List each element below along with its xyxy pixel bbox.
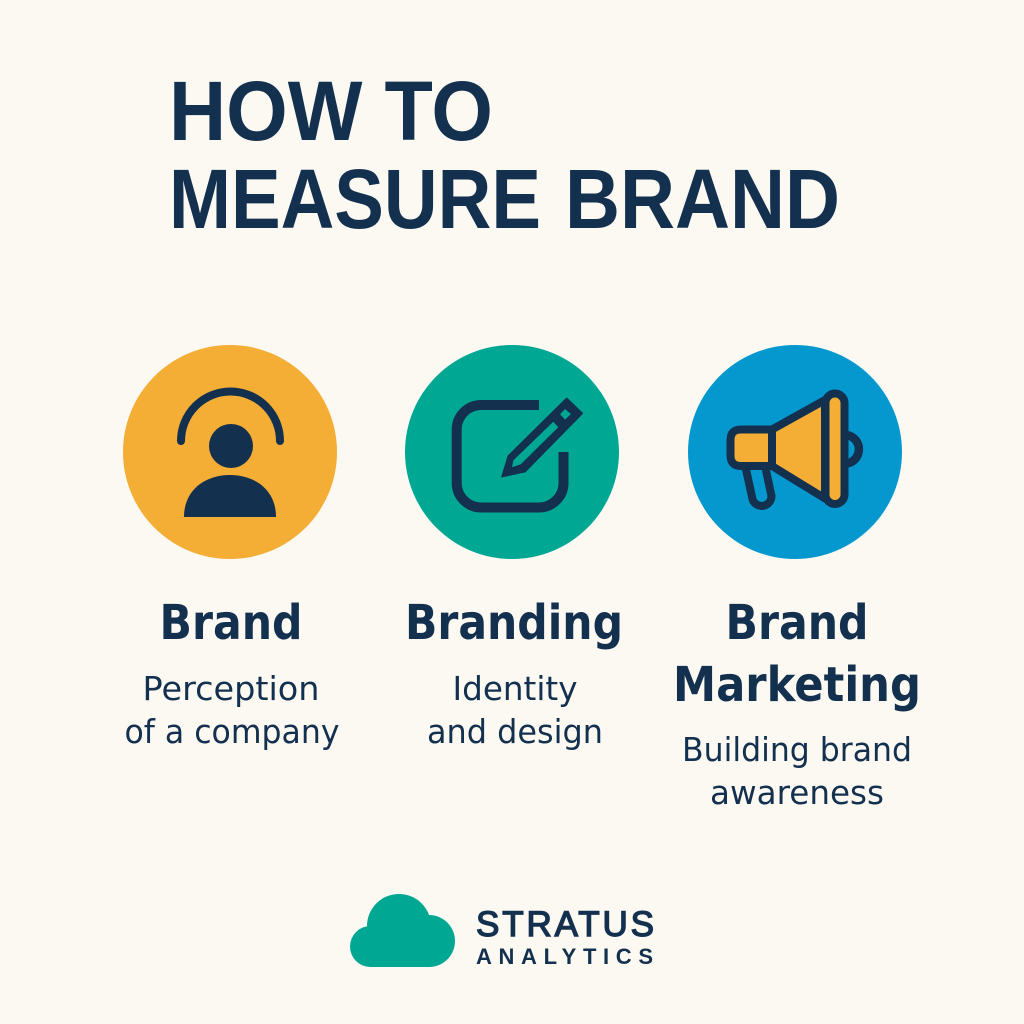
icon: megaphone on blue circle [688, 345, 902, 559]
logo text: Analytics: ANALYTICS [476, 944, 653, 969]
title [169, 64, 840, 246]
description line 2: brand: of a company [124, 712, 340, 751]
description: brand marketing: Building brand [682, 730, 912, 769]
icon: person with arc on orange circle [123, 345, 337, 559]
icon: pencil and square on green circle [405, 345, 619, 559]
heading: Brand Marketing: Marketing [673, 657, 921, 713]
description: brand: Perception [142, 669, 320, 708]
heading: Brand Marketing [673, 595, 921, 713]
description line 2: brand marketing: awareness [710, 773, 884, 812]
icon: cloud [350, 894, 455, 967]
heading: Branding: Branding [405, 595, 623, 651]
logo [350, 894, 654, 969]
heading: Brand Marketing: Brand [726, 595, 868, 651]
panel: branding [405, 345, 623, 751]
title: BRAND [565, 152, 840, 246]
title: MEASURE [169, 152, 541, 246]
panel: brand marketing [673, 345, 921, 812]
panel: brand [123, 345, 340, 751]
description line 2: branding: and design [427, 712, 603, 751]
heading: Brand: Brand [160, 595, 302, 651]
logo text: Stratus: STRATUS [476, 905, 654, 944]
title: HOW TO [169, 64, 493, 158]
description: branding: Identity [452, 669, 578, 708]
